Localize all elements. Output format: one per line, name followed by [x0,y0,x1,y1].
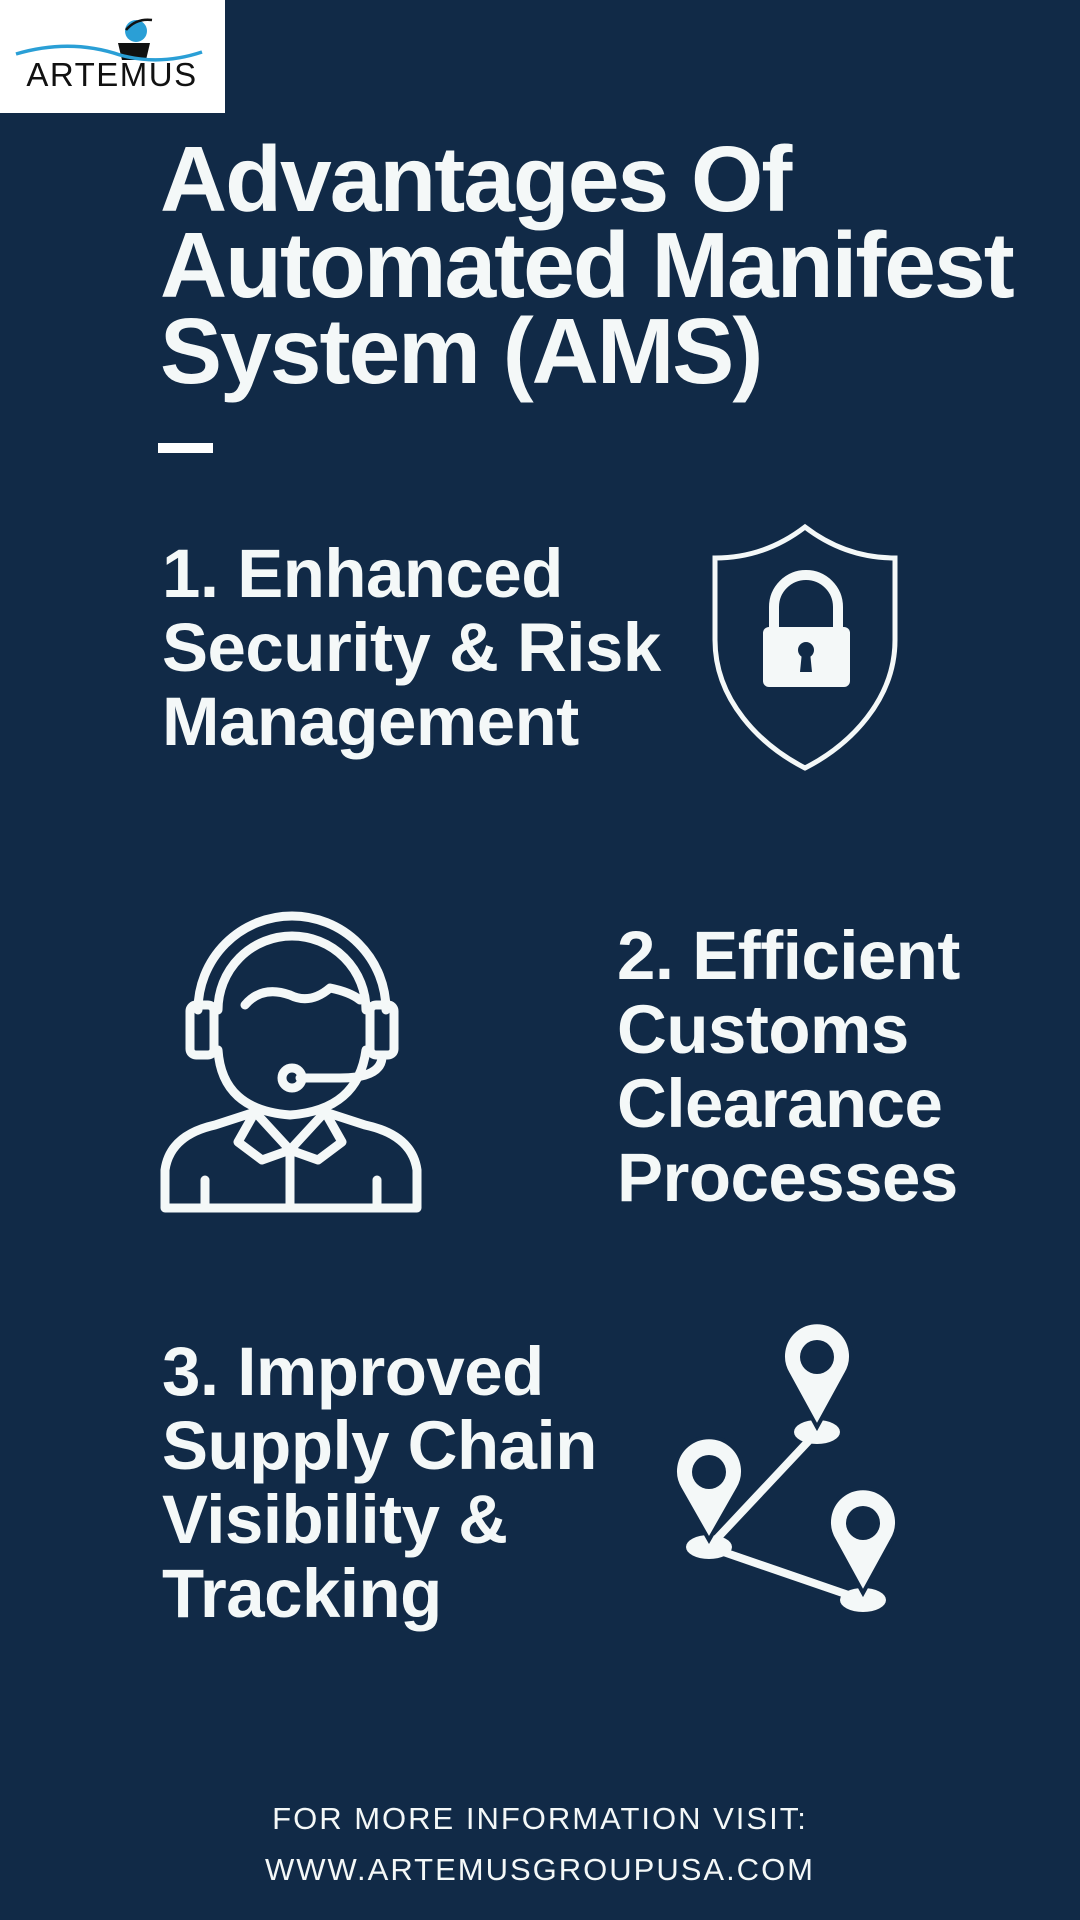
footer [265,1801,815,1887]
logo [0,0,225,113]
heading 3: Visibility & [162,1481,508,1558]
heading 3 [162,1333,597,1632]
heading 3: Tracking [162,1555,442,1632]
heading 1: Security & Risk [162,609,661,686]
heading 3: Supply Chain [162,1407,597,1484]
heading 2: 2. Efficient [617,917,960,994]
heading 2: Customs [617,991,909,1068]
title: System (AMS) [160,299,761,403]
footer: WWW.ARTEMUSGROUPUSA.COM [265,1852,815,1887]
logo: ARTEMUS [26,56,198,93]
title: Advantages Of [160,127,790,231]
title [160,127,1014,403]
heading 1 [162,535,662,760]
heading 3: 3. Improved [162,1333,544,1410]
footer: FOR MORE INFORMATION VISIT: [272,1801,808,1836]
title underline [158,443,213,453]
heading 2: Processes [617,1139,958,1216]
heading 2: Clearance [617,1065,942,1142]
heading 1: Management [162,683,579,760]
heading 2 [617,917,960,1216]
title: Automated Manifest [160,213,1013,317]
heading 1: 1. Enhanced [162,535,563,612]
